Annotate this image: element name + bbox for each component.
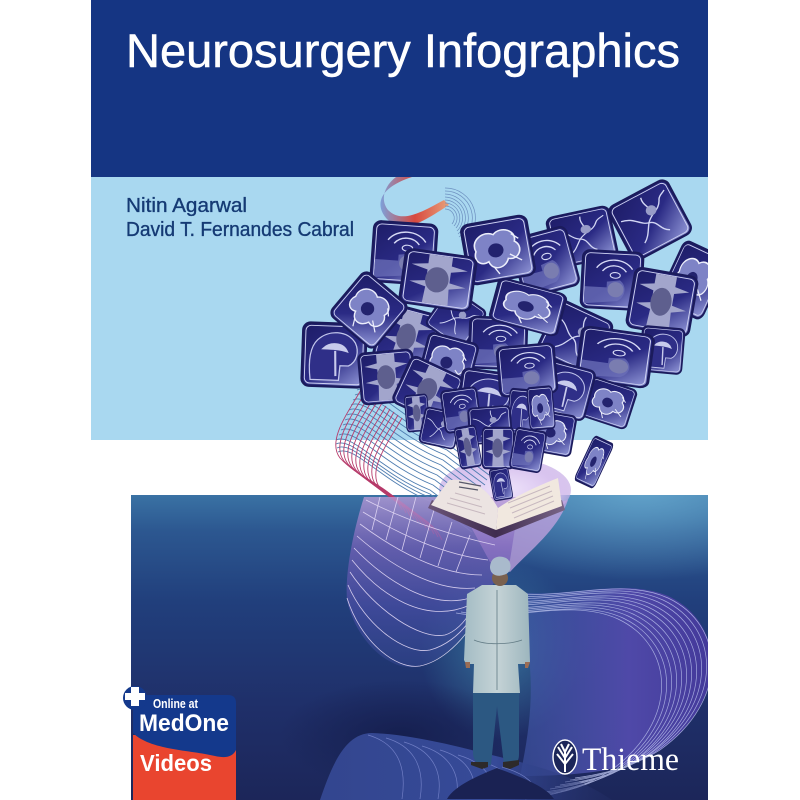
authors: David T. Fernandes Cabral xyxy=(126,219,354,241)
brain scan tiles cloud xyxy=(301,178,729,488)
purple band, left loop xyxy=(347,497,520,667)
header band xyxy=(91,0,708,177)
dark lower panel xyxy=(131,495,708,800)
MedOne videos badge xyxy=(123,686,236,800)
light blue band xyxy=(91,177,708,440)
light cone from book to surgeon xyxy=(470,500,568,572)
Thieme logo: Thieme xyxy=(582,742,679,778)
surgeon standing, seen from behind xyxy=(447,557,554,799)
open book xyxy=(428,467,565,538)
mound in foreground xyxy=(320,733,612,800)
MedOne videos badge: MedOne xyxy=(139,710,229,737)
purple band, right loop xyxy=(456,588,712,799)
authors xyxy=(126,195,354,241)
lower left mesh ribbon xyxy=(336,388,491,540)
glow above book xyxy=(439,458,571,522)
upper ribbon: red and blue twist xyxy=(380,177,475,243)
MedOne videos badge: Online at xyxy=(153,696,199,711)
authors: Nitin Agarwal xyxy=(126,195,247,217)
title: Neurosurgery Infographics xyxy=(126,24,680,77)
MedOne videos badge: Videos xyxy=(140,750,212,776)
